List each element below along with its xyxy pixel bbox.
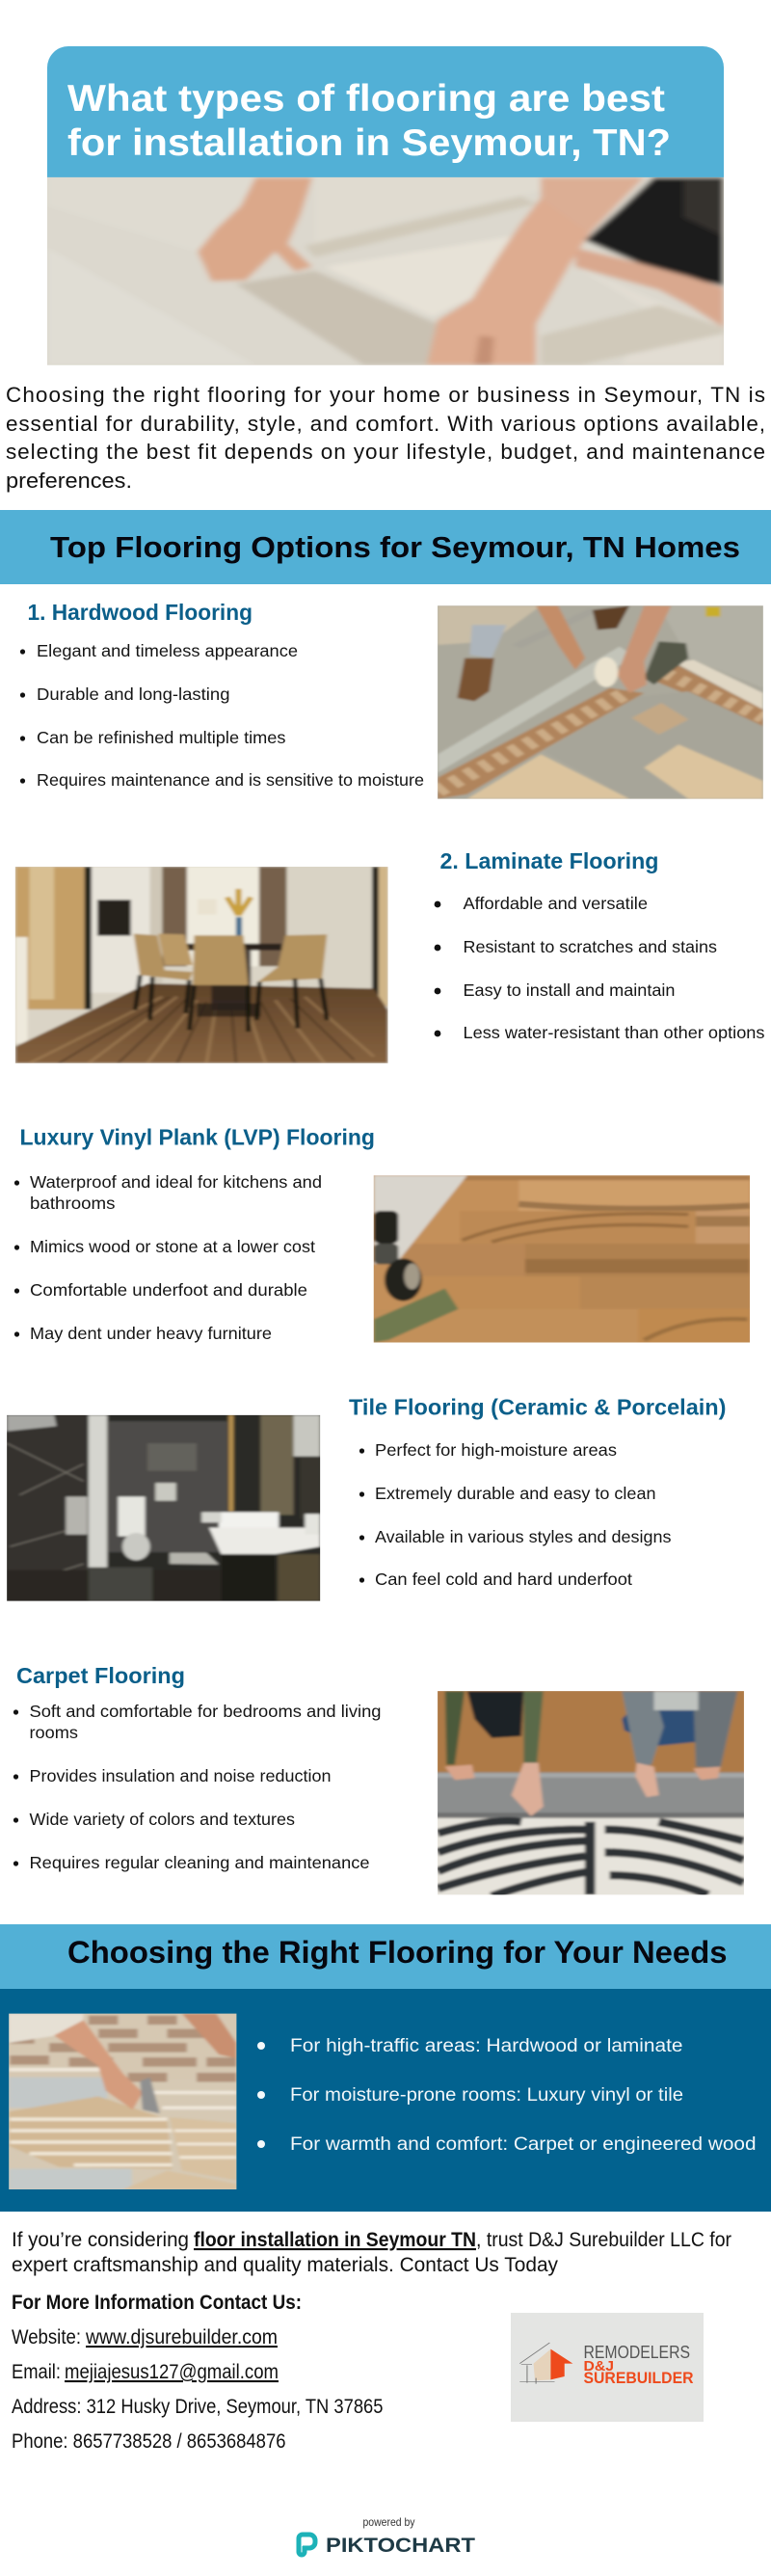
footer: powered by piktochart (299, 2515, 475, 2557)
photo: wood vinyl planks with binoculars (369, 1171, 758, 1347)
bullet list: recommendations: For warmth and comfort: Carpet or engineered wood (290, 2134, 756, 2155)
contact: website: www.djsurebuilder.com (85, 2326, 278, 2348)
icon: piktochart mark (299, 2535, 315, 2555)
footer: powered by piktochart: powered by (362, 2515, 414, 2529)
panel: carpet flooring (13, 1663, 748, 1898)
bullet list: laminate: Resistant to scratches and stains (463, 937, 717, 956)
bullet list: LVP: Mimics wood or stone at a lower cost (30, 1237, 315, 1256)
footer: powered by piktochart: PIKTOCHART (326, 2535, 475, 2557)
intro paragraph: selecting the best fit depends on your lifestyle, budget, and maintenance (6, 440, 765, 464)
bullet list: hardwood (20, 641, 424, 790)
intro paragraph: Choosing the right flooring for your home or business in Seymour, TN is (6, 383, 765, 407)
logo: D&J Surebuilder: REMODELERS (584, 2343, 690, 2362)
panel: luxury vinyl plank flooring (14, 1124, 758, 1347)
photo: marble tiled bathroom (3, 1412, 325, 1605)
intro paragraph: preferences. (6, 469, 132, 493)
bullet list: carpet (13, 1702, 382, 1872)
heading: tile: Tile Flooring (Ceramic & Porcelain) (349, 1394, 727, 1419)
bullet list: laminate (435, 894, 765, 1042)
bullet list: hardwood: Durable and long-lasting (37, 684, 229, 704)
panel: tile flooring (3, 1394, 726, 1605)
bullet list: LVP: Waterproof and ideal for kitchens and (30, 1172, 322, 1192)
logo: D&J Surebuilder: SUREBUILDER (584, 2369, 694, 2387)
title text: What types of flooring are best (67, 78, 665, 120)
bullet list: carpet: Wide variety of colors and textures (29, 1810, 295, 1829)
intro paragraph: essential for durability, style, and comfort. With various options available, (6, 412, 765, 436)
bullet list: laminate: Easy to install and maintain (463, 980, 675, 1000)
bullet list: tile: Available in various styles and designs (375, 1527, 672, 1546)
bullet list: LVP: Comfortable underfoot and durable (30, 1280, 307, 1300)
photo: hardwood inlay installation (433, 602, 771, 804)
bullet list: LVP (14, 1172, 322, 1343)
closing paragraph: If you’re considering (12, 2229, 189, 2251)
panel: hardwood flooring (20, 600, 771, 804)
contact details (12, 2292, 384, 2453)
bullet list: tile: Extremely durable and easy to clean (375, 1484, 655, 1503)
bullet list: LVP: bathrooms (30, 1194, 116, 1213)
heading: LVP: Luxury Vinyl Plank (LVP) Flooring (19, 1124, 375, 1149)
photo: laying tile with trowel (5, 2011, 241, 2193)
bullet list: carpet: Requires regular cleaning and maintenance (29, 1853, 370, 1872)
closing paragraph (12, 2229, 731, 2276)
bullet list: tile: Perfect for high-moisture areas (375, 1440, 617, 1460)
closing paragraph: expert craftsmanship and quality materials. Contact Us Today (12, 2254, 558, 2276)
intro paragraph (6, 383, 765, 493)
section banner: top flooring options: Top Flooring Options for Seymour, TN Homes (50, 530, 740, 564)
section banner: top flooring options (0, 510, 771, 584)
bullet list: carpet: Provides insulation and noise reduction (29, 1766, 332, 1785)
bullet list: recommendations: For high-traffic areas: Hardwood or laminate (290, 2036, 682, 2056)
section banner: choosing the right flooring (0, 1924, 771, 1989)
title text (67, 78, 671, 164)
contact: website: Website: (12, 2326, 81, 2348)
heading: hardwood: 1. Hardwood Flooring (27, 600, 253, 625)
contact: phone: Phone: 8657738528 / 8653684876 (12, 2430, 285, 2453)
panel: laminate flooring (10, 848, 765, 1066)
bullet list: hardwood: Can be refinished multiple times (37, 728, 286, 747)
closing paragraph: floor installation in Seymour TN (194, 2229, 476, 2251)
bullet list: tile (359, 1440, 672, 1589)
bullet list: recommendations: For moisture-prone rooms: Luxury vinyl or tile (290, 2085, 683, 2106)
panel: recommendations (0, 1989, 771, 2212)
closing paragraph: , trust D&J Surebuilder LLC for (476, 2229, 731, 2251)
heading: carpet: Carpet Flooring (16, 1663, 185, 1688)
hero photo: hands installing floor planks (47, 177, 724, 365)
bullet list: laminate: Affordable and versatile (463, 894, 648, 913)
contact: email: mejiajesus127@gmail.com (65, 2361, 279, 2383)
bullet list: recommendations (257, 2036, 756, 2155)
bullet list: LVP: May dent under heavy furniture (30, 1324, 272, 1343)
bullet list: hardwood: Requires maintenance and is sensitive to moisture (37, 770, 424, 790)
heading: laminate: 2. Laminate Flooring (439, 848, 659, 873)
bullet list: carpet: rooms (29, 1723, 78, 1742)
bullet list: laminate: Less water-resistant than other options (463, 1023, 765, 1042)
title text: for installation in Seymour, TN? (67, 122, 671, 164)
icon: house with arrow (519, 2343, 572, 2384)
contact heading: For More Information Contact Us: (12, 2292, 302, 2314)
bullet list: carpet: Soft and comfortable for bedrooms and living (29, 1702, 382, 1721)
logo: D&J Surebuilder: D&J (584, 2358, 614, 2375)
bullet list: hardwood: Elegant and timeless appearance (37, 641, 298, 660)
contact: website (12, 2326, 278, 2348)
title banner (47, 46, 724, 177)
logo: D&J Surebuilder (511, 2313, 704, 2422)
photo: rolling out zebra carpet (433, 1688, 748, 1898)
bullet list: tile: Can feel cold and hard underfoot (375, 1570, 632, 1589)
section banner: choosing the right flooring: Choosing the Right Flooring for Your Needs (67, 1935, 727, 1970)
photo: dining room with laminate floor (10, 864, 393, 1066)
contact: email: Email: (12, 2361, 61, 2383)
contact: address: Address: 312 Husky Drive, Seymour, TN 37865 (12, 2396, 384, 2418)
